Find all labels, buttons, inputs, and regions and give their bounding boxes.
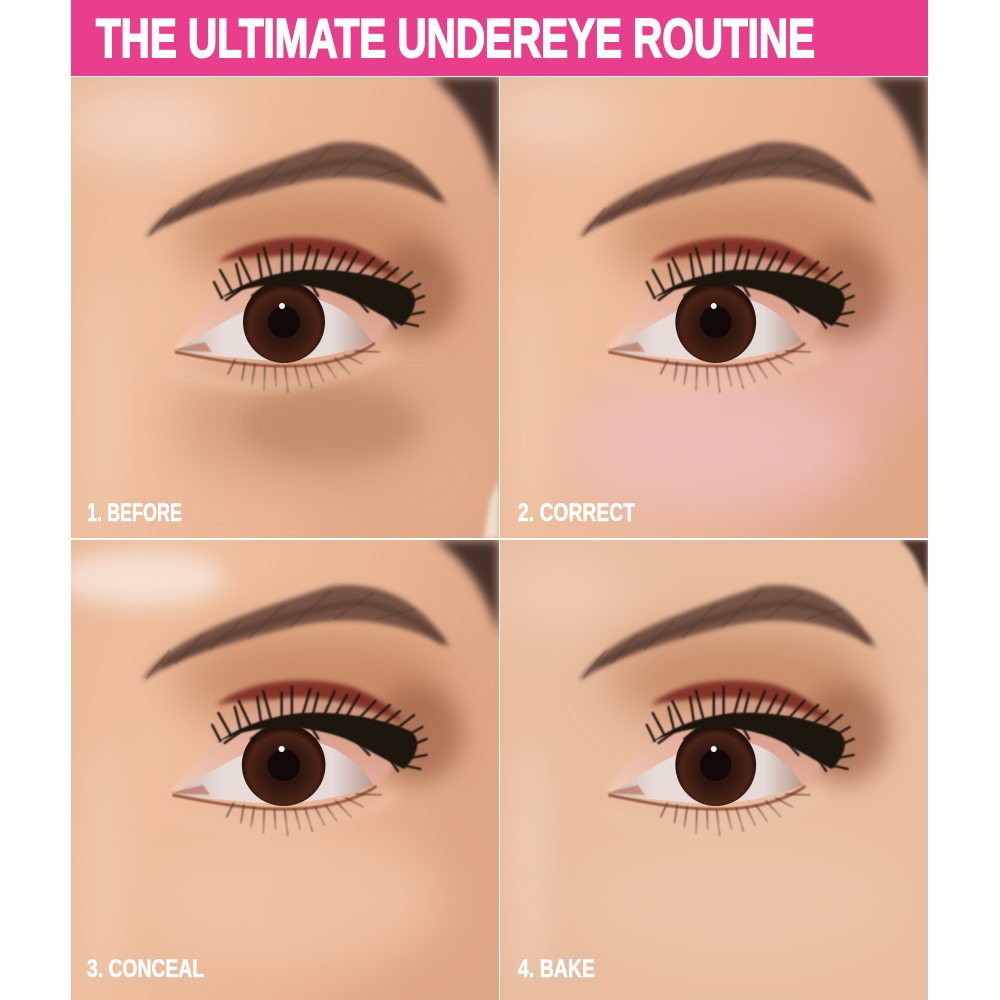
pink corrector under the eye xyxy=(570,375,870,515)
eye 3 xyxy=(142,585,463,835)
step label: 1. before: 1. BEFORE xyxy=(87,499,182,527)
dark circle under the eye xyxy=(175,358,425,482)
photo panel: 4. bake xyxy=(490,540,928,1000)
header band xyxy=(71,0,928,76)
eye 1 xyxy=(145,142,460,392)
step label: 4. bake: 4. BAKE xyxy=(518,955,595,983)
step label: 3. conceal: 3. CONCEAL xyxy=(87,955,204,983)
step label: 2. correct: 2. CORRECT xyxy=(518,499,635,527)
photo panel: 2. correct xyxy=(480,77,928,538)
eye 4 xyxy=(579,585,889,835)
eye 2 xyxy=(579,142,889,392)
photo panel: 3. conceal xyxy=(55,540,499,1000)
photo panel: 1. before xyxy=(55,77,499,540)
